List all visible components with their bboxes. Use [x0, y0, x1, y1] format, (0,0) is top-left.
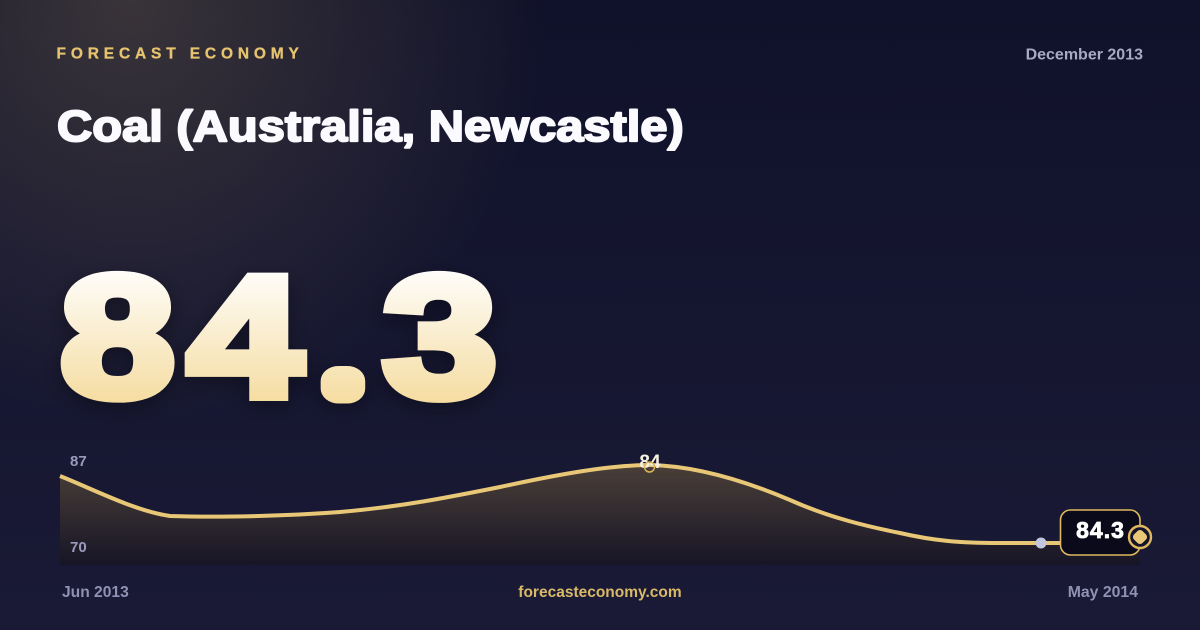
- site url: forecasteconomy.com: [518, 584, 682, 601]
- axis label: 70: 70: [70, 539, 87, 556]
- axis label: 87: 87: [70, 453, 87, 470]
- previous point marker: [1036, 538, 1046, 548]
- big value: .: [335, 343, 351, 399]
- chart line: [60, 465, 1062, 543]
- chart area fill: [60, 465, 1140, 565]
- current value callout: 84.3: [1076, 517, 1125, 543]
- area chart: [60, 465, 1140, 565]
- current point marker: [1129, 526, 1151, 548]
- end date label: May 2014: [1068, 584, 1138, 601]
- date: December 2013: [1026, 46, 1143, 64]
- peak label: 84: [639, 452, 661, 473]
- current value callout: [1060, 510, 1140, 555]
- big value: 3: [382, 241, 497, 433]
- start date label: Jun 2013: [62, 584, 129, 601]
- brand heading: FORECAST ECONOMY: [56, 46, 304, 62]
- big value: 84: [60, 241, 302, 433]
- title: Coal (Australia, Newcastle): [57, 101, 684, 150]
